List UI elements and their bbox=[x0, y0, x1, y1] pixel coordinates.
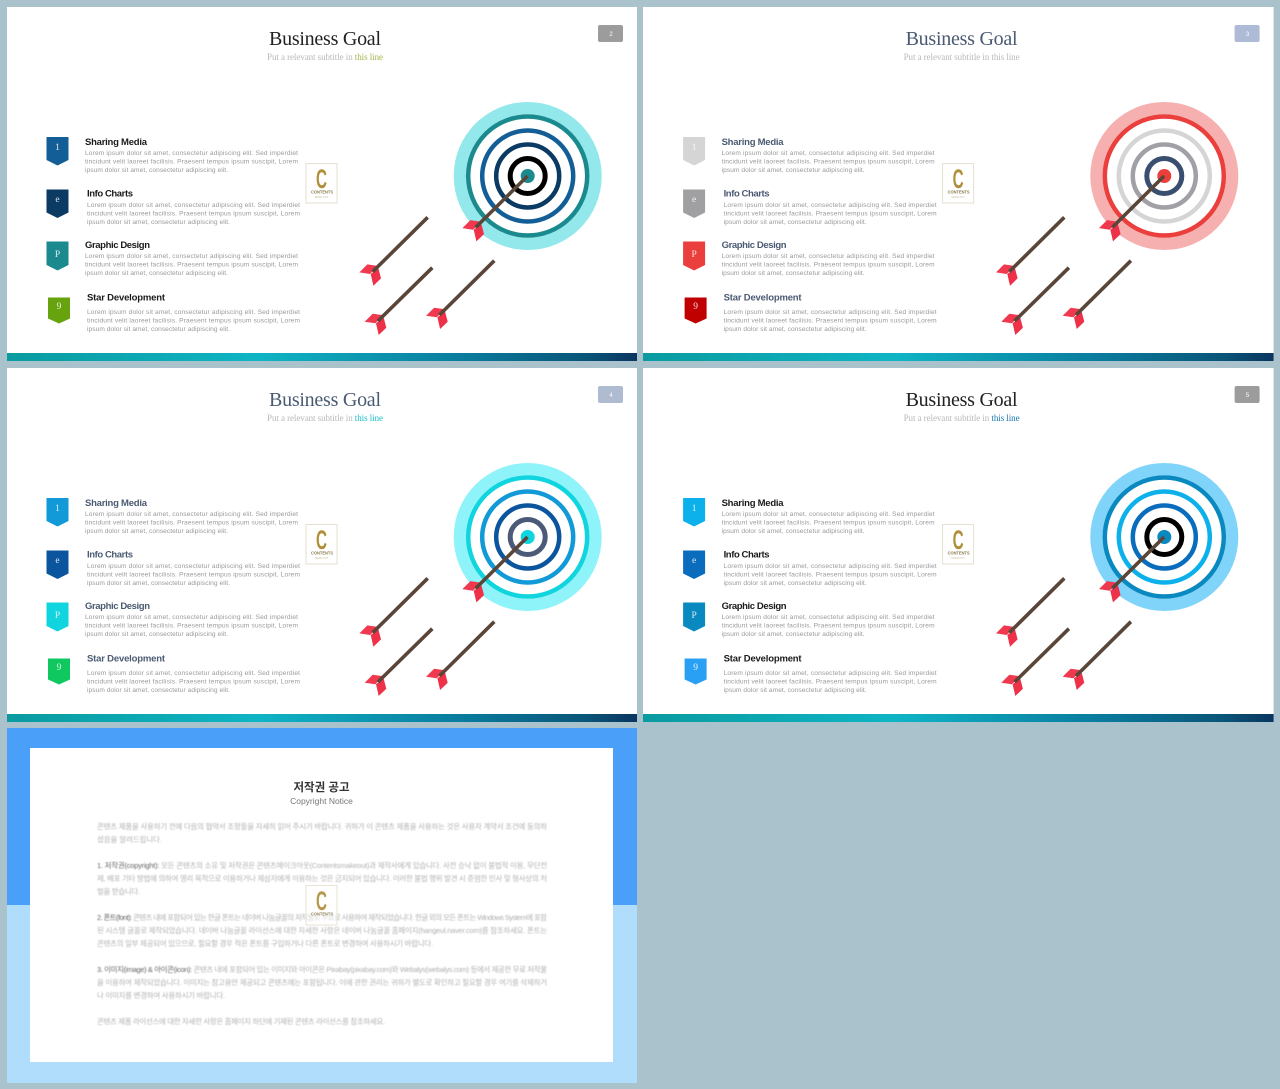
logo: CONTENTS bbox=[948, 550, 970, 556]
panel: slide 4 cyan bbox=[7, 368, 637, 722]
list item: Info Charts bbox=[46, 550, 300, 587]
list item: Graphic Design: Lorem ipsum dolor sit amet, consectetur adipiscing elit. Sed imperdiet bbox=[85, 253, 298, 260]
arrow in target bbox=[462, 537, 528, 602]
list item: Sharing Media: tincidunt velit laoreet facilisis. Praesent tempus ipsum suscipit, Lorem bbox=[722, 520, 935, 526]
logo: C bbox=[953, 164, 964, 194]
list item: Info Charts: Info Charts bbox=[87, 550, 133, 560]
arrow 3 bbox=[1063, 261, 1131, 329]
arrow 2 bbox=[365, 268, 432, 335]
list item: Star Development bbox=[685, 292, 937, 333]
copyright body text: 벌을 받습니다. bbox=[97, 887, 140, 896]
list item: Sharing Media: Lorem ipsum dolor sit amet, consectetur adipiscing elit. Sed imperdiet bbox=[85, 511, 298, 518]
list item: Star Development: ipsum dolor sit amet, consectetur adipiscing elit. bbox=[87, 326, 230, 333]
list item: Star Development: Star Development bbox=[87, 654, 166, 664]
list item: Graphic Design: P bbox=[55, 250, 60, 260]
list item: Graphic Design: Graphic Design bbox=[722, 240, 787, 251]
list item: Star Development: Lorem ipsum dolor sit amet, consectetur adipiscing elit. Sed imperdiet bbox=[87, 670, 300, 677]
arrow in target bbox=[1099, 176, 1164, 241]
target bbox=[1090, 463, 1238, 611]
list item: Info Charts: tincidunt velit laoreet facilisis. Praesent tempus ipsum suscipit, Lorem bbox=[724, 572, 937, 578]
list item: Graphic Design bbox=[46, 240, 298, 277]
arrow 3 bbox=[426, 622, 494, 690]
list item: Graphic Design bbox=[683, 240, 935, 277]
list item: Graphic Design: P bbox=[55, 611, 60, 621]
logo bbox=[306, 886, 337, 925]
list item: Star Development: Star Development bbox=[87, 292, 166, 304]
list item: Info Charts bbox=[46, 188, 300, 226]
list item: Star Development: tincidunt velit laoreet facilisis. Praesent tempus ipsum suscipit, Lorem bbox=[724, 678, 937, 686]
list item: Info Charts: e bbox=[692, 195, 696, 205]
list item: Graphic Design: P bbox=[691, 611, 697, 621]
list item: Sharing Media: Sharing Media bbox=[85, 498, 148, 509]
arrow 3 bbox=[426, 261, 494, 329]
page number badge bbox=[598, 386, 623, 403]
panel: slide 2 teal bbox=[7, 7, 637, 361]
arrow 1 bbox=[996, 217, 1064, 286]
list item: Sharing Media: ipsum dolor sit amet, consectetur adipiscing elit. bbox=[85, 528, 228, 535]
page number badge: 2 bbox=[609, 32, 613, 38]
list item: Info Charts: tincidunt velit laoreet facilisis. Praesent tempus ipsum suscipit, Lorem bbox=[87, 210, 300, 218]
bottom bar bbox=[7, 714, 637, 722]
list item: Info Charts: ipsum dolor sit amet, consectetur adipiscing elit. bbox=[724, 219, 867, 226]
title: Business Goal bbox=[269, 28, 381, 50]
list item: Sharing Media bbox=[46, 498, 298, 535]
list item: Info Charts: ipsum dolor sit amet, consectetur adipiscing elit. bbox=[87, 219, 230, 226]
list item: Star Development: 9 bbox=[693, 663, 698, 673]
list item: Sharing Media: ipsum dolor sit amet, consectetur adipiscing elit. bbox=[85, 167, 228, 174]
logo bbox=[943, 524, 974, 564]
list item: Star Development: ipsum dolor sit amet, consectetur adipiscing elit. bbox=[724, 326, 867, 333]
title: Business Goal bbox=[269, 389, 381, 411]
logo: C bbox=[316, 164, 327, 194]
bottom bar bbox=[643, 353, 1274, 361]
list item: Star Development: 9 bbox=[693, 302, 698, 312]
arrow 2 bbox=[1001, 629, 1069, 696]
target bbox=[454, 463, 602, 611]
bottom bar bbox=[643, 714, 1274, 722]
list item: Graphic Design: tincidunt velit laoreet facilisis. Praesent tempus ipsum suscipit, Lorem bbox=[85, 622, 298, 630]
copyright body text: 콘텐츠의 일부 제공되어 있으므로, 필요할 경우 적은 폰트를 구입하거나 다른 폰트로 변경하여 사용하시기 바랍니다. bbox=[97, 939, 433, 948]
list item: Star Development: tincidunt velit laoreet facilisis. Praesent tempus ipsum suscipit, Lorem bbox=[724, 318, 937, 324]
list item: Info Charts: e bbox=[692, 556, 696, 566]
list item: Sharing Media: tincidunt velit laoreet facilisis. Praesent tempus ipsum suscipit, Lorem bbox=[85, 520, 298, 526]
list item: Sharing Media bbox=[683, 498, 935, 535]
page number badge bbox=[1235, 25, 1260, 42]
list item: Info Charts: Info Charts bbox=[724, 188, 770, 200]
list item: Graphic Design: Lorem ipsum dolor sit amet, consectetur adipiscing elit. Sed imperdiet bbox=[722, 253, 935, 260]
subtitle: Put a relevant subtitle in this line bbox=[267, 413, 383, 423]
list item: Star Development: Lorem ipsum dolor sit amet, consectetur adipiscing elit. Sed imperdiet bbox=[724, 309, 937, 316]
subtitle: Put a relevant subtitle in this line bbox=[267, 52, 383, 62]
list item: Sharing Media: Lorem ipsum dolor sit amet, consectetur adipiscing elit. Sed imperdiet bbox=[722, 150, 935, 157]
arrow 2 bbox=[365, 629, 432, 696]
logo: C bbox=[316, 525, 327, 555]
list item: Star Development bbox=[48, 292, 300, 333]
list item: Info Charts: Lorem ipsum dolor sit amet, consectetur adipiscing elit. Sed imperdiet bbox=[87, 563, 300, 570]
list item: Graphic Design: tincidunt velit laoreet facilisis. Praesent tempus ipsum suscipit, Lorem bbox=[722, 262, 935, 268]
subtitle: Put a relevant subtitle in this line bbox=[904, 52, 1020, 62]
logo bbox=[306, 164, 337, 203]
arrow 1 bbox=[996, 578, 1064, 647]
list item: Star Development: 9 bbox=[57, 302, 62, 312]
panel: slide 5 blue bbox=[643, 368, 1274, 722]
list item: Star Development: ipsum dolor sit amet, consectetur adipiscing elit. bbox=[87, 687, 230, 694]
logo: MAKE OUT bbox=[315, 195, 329, 199]
list item: Graphic Design: tincidunt velit laoreet facilisis. Praesent tempus ipsum suscipit, Lorem bbox=[722, 622, 935, 630]
list item: Sharing Media: tincidunt velit laoreet facilisis. Praesent tempus ipsum suscipit, Lorem bbox=[722, 158, 935, 166]
list item: Star Development: Star Development bbox=[724, 292, 802, 304]
list item: Graphic Design: ipsum dolor sit amet, consectetur adipiscing elit. bbox=[85, 270, 228, 277]
list item: Info Charts: e bbox=[55, 556, 60, 566]
list item: Graphic Design: tincidunt velit laoreet facilisis. Praesent tempus ipsum suscipit, Lorem bbox=[85, 262, 298, 268]
copyright body text: 콘텐츠 제품을 사용하기 전에 다음의 협약서 조항들을 자세히 읽어 주시기 바랍니다. 귀하가 이 콘텐츠 제품을 사용하는 것은 사용자 계약서 조건에 동의하 bbox=[97, 822, 547, 831]
copyright body text: 콘텐츠 제품 라이선스에 대한 자세한 사항은 홈페이지 하단에 기재된 콘텐츠 라이선스를 참조하세요. bbox=[97, 1017, 385, 1026]
page number badge bbox=[598, 25, 623, 42]
list item: Star Development: Star Development bbox=[724, 654, 802, 664]
list item: Graphic Design: Graphic Design bbox=[722, 601, 787, 612]
list item: Info Charts: ipsum dolor sit amet, consectetur adipiscing elit. bbox=[724, 580, 867, 587]
list item: Sharing Media: tincidunt velit laoreet facilisis. Praesent tempus ipsum suscipit, Lorem bbox=[85, 158, 298, 166]
list item: Graphic Design: Lorem ipsum dolor sit amet, consectetur adipiscing elit. Sed imperdiet bbox=[85, 614, 298, 621]
copyright body text: 나 이미지를 변경하여 사용하시기 바랍니다. bbox=[97, 991, 225, 1000]
copyright body text: 1. 저작권(copyright): 모든 콘텐츠의 소유 및 저작권은 콘텐츠메이크아웃(Contentsmakeout)과 제작사에게 있습니다. 사전 승낙 없이 불법적 이용, 무단전 bbox=[97, 861, 547, 870]
list item: Info Charts: Info Charts bbox=[724, 550, 770, 560]
list item: Sharing Media: Lorem ipsum dolor sit amet, consectetur adipiscing elit. Sed imperdiet bbox=[85, 150, 298, 157]
list item: Sharing Media: 1 bbox=[692, 504, 697, 514]
logo: CONTENTS bbox=[311, 190, 333, 194]
list item: Sharing Media bbox=[46, 137, 298, 174]
copyright body text: 2. 폰트(font): 콘텐츠 내에 포함되어 있는 한글 폰트는 네이버 나눔글꼴의 저작물로 무료로 사용하여 제작되었습니다. 한글 외의 모든 폰트는 Windows System에 포함 bbox=[97, 913, 547, 922]
copyright body text: 3. 이미지(image) & 아이콘(icon): 콘텐츠 내에 포함되어 있는 이미지와 아이콘은 Pixabay(pixabay.com)와 Webalys(webalys.com) 등에서 제공한 무료 저작물 bbox=[97, 965, 547, 974]
title: Business Goal bbox=[906, 389, 1018, 411]
list item: Sharing Media: Sharing Media bbox=[722, 498, 784, 509]
list item: Star Development: 9 bbox=[57, 663, 62, 673]
list item: Sharing Media: Sharing Media bbox=[85, 137, 148, 148]
page number badge bbox=[1235, 386, 1260, 403]
list item: Sharing Media bbox=[683, 137, 935, 174]
list item: Info Charts: Lorem ipsum dolor sit amet, consectetur adipiscing elit. Sed imperdiet bbox=[724, 563, 937, 570]
copyright heading: 저작권 공고 bbox=[293, 780, 350, 794]
arrow in target bbox=[1099, 537, 1164, 602]
list item: Graphic Design: Graphic Design bbox=[85, 601, 150, 612]
list item: Graphic Design: Lorem ipsum dolor sit amet, consectetur adipiscing elit. Sed imperdiet bbox=[722, 614, 935, 621]
list item: Star Development: ipsum dolor sit amet, consectetur adipiscing elit. bbox=[724, 687, 867, 694]
logo: CONTENTS bbox=[311, 912, 333, 916]
list item: Info Charts: e bbox=[55, 195, 60, 205]
list item: Star Development: tincidunt velit laoreet facilisis. Praesent tempus ipsum suscipit, Lorem bbox=[87, 678, 300, 686]
subtitle: Put a relevant subtitle in this line bbox=[904, 413, 1020, 423]
copyright body text: 을 이용하여 제작되었습니다. 이미지는 참고용만 제공되고 콘텐츠에는 포함됩니다. 이에 관한 권리는 귀하가 별도로 확인하고 필요할 경우 여기를 삭제하거 bbox=[97, 978, 547, 987]
target bbox=[1090, 102, 1238, 250]
list item: Graphic Design bbox=[683, 601, 935, 638]
logo: MAKE OUT bbox=[951, 195, 965, 199]
logo: MAKE OUT bbox=[315, 556, 329, 560]
list item: Graphic Design: P bbox=[691, 250, 697, 260]
list item: Sharing Media: ipsum dolor sit amet, consectetur adipiscing elit. bbox=[722, 167, 865, 174]
page number badge: 3 bbox=[1246, 32, 1250, 38]
list item: Sharing Media: Sharing Media bbox=[722, 137, 784, 148]
title: Business Goal bbox=[906, 28, 1018, 50]
list item: Graphic Design: ipsum dolor sit amet, consectetur adipiscing elit. bbox=[722, 270, 865, 277]
list item: Info Charts: tincidunt velit laoreet facilisis. Praesent tempus ipsum suscipit, Lorem bbox=[724, 210, 937, 218]
list item: Star Development bbox=[48, 654, 300, 694]
logo: CONTENTS bbox=[311, 550, 333, 556]
logo: C bbox=[316, 886, 327, 916]
list item: Info Charts: Info Charts bbox=[87, 188, 133, 200]
copyright subheading: Copyright Notice bbox=[290, 796, 353, 806]
list item: Star Development: Lorem ipsum dolor sit amet, consectetur adipiscing elit. Sed imperdiet bbox=[724, 670, 937, 677]
arrow 1 bbox=[359, 578, 428, 647]
list item: Star Development: tincidunt velit laoreet facilisis. Praesent tempus ipsum suscipit, Lorem bbox=[87, 318, 300, 324]
list item: Sharing Media: 1 bbox=[55, 143, 60, 153]
arrow 1 bbox=[359, 217, 428, 286]
list item: Sharing Media: Lorem ipsum dolor sit amet, consectetur adipiscing elit. Sed imperdiet bbox=[722, 511, 935, 518]
list item: Star Development: Lorem ipsum dolor sit amet, consectetur adipiscing elit. Sed imperdiet bbox=[87, 309, 300, 316]
logo bbox=[306, 524, 337, 564]
logo: CONTENTS bbox=[948, 190, 970, 194]
list item: Info Charts: ipsum dolor sit amet, consectetur adipiscing elit. bbox=[87, 580, 230, 587]
list item: Graphic Design: ipsum dolor sit amet, consectetur adipiscing elit. bbox=[85, 631, 228, 638]
list item: Info Charts bbox=[683, 550, 937, 587]
arrow 3 bbox=[1063, 622, 1131, 690]
logo bbox=[943, 164, 974, 203]
list item: Info Charts bbox=[683, 188, 937, 226]
list item: Sharing Media: ipsum dolor sit amet, consectetur adipiscing elit. bbox=[722, 528, 865, 535]
list item: Info Charts: Lorem ipsum dolor sit amet, consectetur adipiscing elit. Sed imperdiet bbox=[724, 202, 937, 209]
list item: Info Charts: Lorem ipsum dolor sit amet, consectetur adipiscing elit. Sed imperdiet bbox=[87, 202, 300, 209]
copyright body text: 셨음을 알려드립니다. bbox=[97, 835, 162, 844]
copyright body text bbox=[97, 822, 547, 1026]
list item: Graphic Design: ipsum dolor sit amet, consectetur adipiscing elit. bbox=[722, 631, 865, 638]
copyright body text: 재, 배포 기타 방법에 의하여 영리 목적으로 이용하거나 제삼자에게 이용하는 것은 금지되어 있습니다. 이러한 불법 행위 발견 시 준엄한 민사 및 형사상의 처 bbox=[97, 874, 547, 883]
logo: MAKE OUT bbox=[951, 556, 965, 560]
panel: slide 3 red bbox=[643, 7, 1274, 361]
list item: Sharing Media: 1 bbox=[692, 143, 697, 153]
bottom bar bbox=[7, 353, 637, 361]
list item: Star Development bbox=[685, 654, 937, 694]
arrow in target bbox=[462, 176, 528, 241]
list item: Graphic Design bbox=[46, 601, 298, 638]
logo: C bbox=[953, 525, 964, 555]
panel: copyright notice bbox=[7, 728, 637, 1083]
page number badge: 4 bbox=[609, 393, 613, 399]
list item: Info Charts: tincidunt velit laoreet facilisis. Praesent tempus ipsum suscipit, Lorem bbox=[87, 572, 300, 578]
list item: Graphic Design: Graphic Design bbox=[85, 240, 150, 251]
list item: Sharing Media: 1 bbox=[55, 504, 60, 514]
copyright body text: 된 시스템 글꼴로 제작되었습니다. 네이버 나눔글꼴 라이선스에 대한 자세한 사항은 네이버 나눔글꼴 홈페이지(hangeul.naver.com)를 참조하세요. 폰트는 bbox=[97, 926, 547, 935]
page number badge: 5 bbox=[1246, 393, 1250, 399]
arrow 2 bbox=[1001, 268, 1069, 335]
target bbox=[454, 102, 602, 250]
